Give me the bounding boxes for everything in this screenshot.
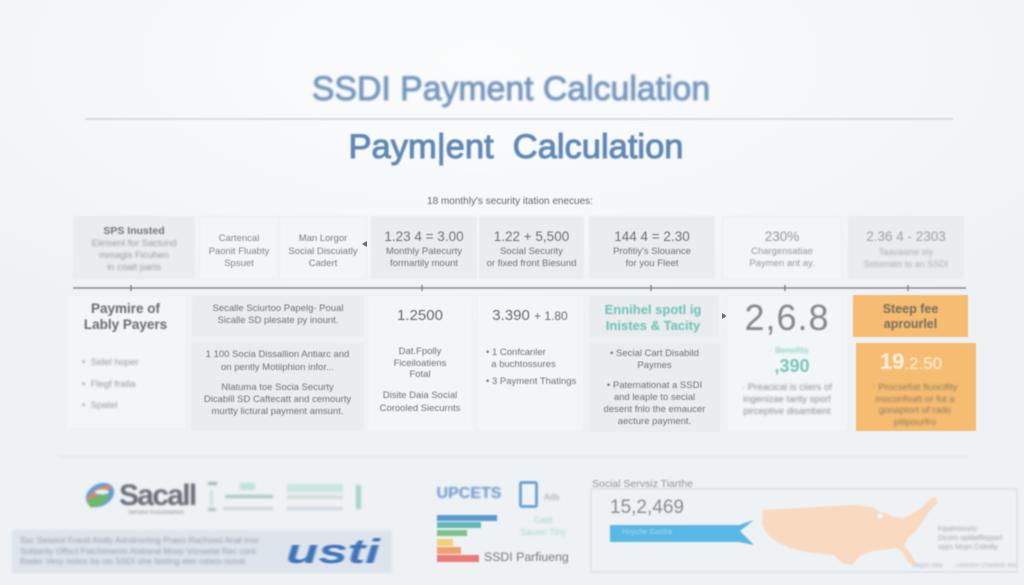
card 7 text: Paymen ant ay. bbox=[749, 258, 815, 269]
document label: Ads bbox=[544, 492, 560, 502]
orange text: gonaptort of rado bbox=[879, 405, 951, 416]
column 1 heading: Lably Payers bbox=[84, 316, 167, 332]
panel: top row card 6 bbox=[589, 216, 715, 279]
teal label bbox=[520, 515, 566, 538]
column 2 body text 2: Nlatuma toe Socia Securty bbox=[221, 382, 334, 393]
card 6 figure: 144 4 = 2.30 bbox=[614, 229, 690, 244]
panel: orange body bbox=[856, 343, 976, 431]
column 6 teal figure: ,390 bbox=[774, 356, 810, 376]
column 3 footer text: Disite Daia Social bbox=[383, 390, 457, 401]
intro text: 18 monthly's security itation enecues: bbox=[427, 196, 593, 207]
orange header text: aprourlel bbox=[884, 317, 937, 331]
column 6 text: pirceptive disambent bbox=[743, 406, 831, 417]
panel: top row card 5 bbox=[479, 216, 584, 279]
column 2 header text bbox=[212, 303, 344, 326]
panel: lower column 3 bbox=[367, 295, 473, 431]
orange text: moconfoatt or fot a bbox=[875, 394, 955, 404]
subtitle: Payment Calculation: Paym|ent Calculation bbox=[349, 128, 683, 166]
card 1 text: mmagis Ficuhen bbox=[99, 250, 169, 261]
panel: lower column 5 body bbox=[589, 343, 720, 432]
card 5 text: or fixed front Biesund bbox=[487, 258, 576, 269]
column 6 text bbox=[742, 382, 833, 417]
card 3 text bbox=[288, 233, 358, 269]
banner text: Ssc Seseiot Fraud Atolly Adrstrocting Praeo Rachsed Anal mor bbox=[20, 535, 259, 545]
map notes: Fipathbourtu bbox=[938, 526, 977, 533]
rainbow bar chart bbox=[436, 514, 498, 563]
column 3 footer text: Corooled Siecurnts bbox=[380, 403, 460, 414]
card 8 text: Setomatn to an SSDI bbox=[864, 259, 948, 269]
column 5 list: and leaple to secial bbox=[614, 392, 695, 403]
ribbon text: Hoyche Gastra bbox=[622, 527, 672, 536]
card 5 figure: 1.22 + 5,500 bbox=[494, 229, 569, 244]
column 1 list: • Sidel hoper bbox=[82, 357, 139, 368]
column 3 figure: 1.2500 bbox=[397, 307, 443, 324]
column 5 heading: Ennihel spotl ig bbox=[605, 302, 701, 317]
logo: UPCETS: UPCETS bbox=[437, 485, 501, 502]
orange text: ptlipourfro bbox=[894, 416, 936, 428]
column 2 body text 1 bbox=[206, 349, 350, 373]
panel: top row card 2 bbox=[199, 216, 279, 279]
card 8 figure: 2.36 4 - 2303 bbox=[866, 229, 946, 244]
panel: lower column 4 bbox=[476, 295, 584, 431]
orange header text bbox=[882, 302, 939, 332]
column 6 text: · Preacical is ciiers of bbox=[742, 382, 832, 393]
column 2 body text 2: murtty lictural payment amsunt. bbox=[212, 406, 344, 417]
panel: top row card 7 bbox=[722, 216, 842, 279]
arrow: left pointer bbox=[362, 241, 367, 247]
panel: lower column 2 header bbox=[192, 295, 364, 337]
map notes: Ocsiro upldatfleppart bbox=[938, 535, 1003, 542]
column 4 list: a buchtossures bbox=[491, 358, 556, 370]
map footnotes: Regon data Uberdon Chasition Ma bbox=[912, 563, 1016, 569]
card 5 text: Social Security bbox=[500, 246, 563, 257]
column 4 list: • 1 Confcanler bbox=[486, 347, 546, 358]
orange text: · Procsefiat fiuocifity bbox=[872, 382, 958, 393]
card 4 text: Monthly Patecurty bbox=[386, 246, 462, 257]
logo wordmark: Sacall bbox=[119, 479, 196, 512]
column 2 body text 2 bbox=[204, 382, 352, 417]
column 5 list: desent fnlo the emaucer bbox=[604, 404, 705, 415]
map notes bbox=[937, 525, 1003, 551]
column 1 heading bbox=[84, 301, 168, 333]
ribbon bbox=[609, 520, 754, 546]
banner: disclaimer bbox=[12, 530, 392, 573]
column 1 list: • Spatel bbox=[82, 400, 118, 411]
card 7 figure: 230% bbox=[765, 229, 799, 244]
panel: lower column 2 body bbox=[191, 342, 364, 431]
banner logo: usti: usti bbox=[286, 533, 380, 571]
logo: Sacall bbox=[84, 479, 197, 516]
column 1 heading: Paymire of bbox=[91, 301, 160, 316]
card 6 text: for you Fleet bbox=[626, 258, 678, 269]
column 5 list: Paymes bbox=[637, 360, 672, 371]
orange figure: 19.2.50 bbox=[880, 349, 942, 374]
panel: lower column 1 bbox=[65, 295, 187, 430]
column 3 text: Fotal bbox=[409, 369, 431, 380]
card 4 text: formartily mount bbox=[390, 258, 458, 269]
card 1 heading: SPS Inusted bbox=[103, 225, 165, 237]
card 2 text bbox=[208, 233, 270, 269]
title underline bbox=[85, 118, 953, 120]
card 1 text: in coalt parts bbox=[107, 262, 161, 273]
card 3 text: Social Discuiatly bbox=[288, 246, 358, 256]
column 5 list: • Paternationat a SSDI bbox=[607, 380, 702, 391]
map notes: opps Moyn Cidedty bbox=[938, 544, 998, 551]
card 6 text: Profitiy's Slouance bbox=[613, 246, 691, 257]
card 3 text: Man Lorgor bbox=[299, 233, 347, 244]
column 1 list bbox=[82, 357, 139, 411]
card 6 text bbox=[613, 246, 691, 269]
banner text: Soldarity Offsct Patchiments Alatiand Moay Vonselat Rec cont bbox=[20, 546, 256, 556]
panel: orange header bbox=[853, 295, 968, 337]
column 1 list: • Flegf fratla bbox=[82, 378, 135, 390]
column 5 list: • Secial Cart Disabild bbox=[610, 348, 699, 359]
column 3 text: Dat.Fpolly bbox=[399, 346, 441, 357]
panel: top row card 3 bbox=[279, 216, 367, 279]
teal label: Gast bbox=[533, 515, 552, 525]
orange header text: Steep fee bbox=[883, 302, 938, 316]
panel: map stats bbox=[590, 488, 1018, 573]
card 4 text bbox=[386, 246, 462, 269]
teal label: Sausic Tiny bbox=[520, 527, 566, 537]
column 2 header text: Secalle Sciurtoo Papelg- Poual bbox=[213, 303, 343, 314]
card 2 text: Spsuet bbox=[224, 258, 254, 269]
column 2 body text 2: Dicabill SD Caftecatt and cemourty bbox=[204, 394, 351, 405]
panel: top row card 1 bbox=[73, 216, 195, 279]
map panel caption: Social Servsiz Tiarthe bbox=[592, 478, 693, 490]
logo icon bbox=[84, 481, 116, 509]
card 5 text bbox=[486, 246, 576, 269]
banner text: Bader Vesy notes Ita ois SSDI ohe fasting eter rotaro ousat. bbox=[20, 556, 247, 566]
arrow: right pointer bbox=[722, 313, 727, 319]
column 2 header text: Sicalle SD plesate py inount. bbox=[218, 315, 338, 326]
column 2 body text 1: 1 100 Socia Dissallion Antiarc and bbox=[206, 349, 349, 360]
card 1 text: Eleisent for Sactund bbox=[91, 238, 177, 249]
column 3 footer text bbox=[379, 390, 461, 414]
column 4 list bbox=[486, 347, 576, 387]
map panel figure: 15,2,469 bbox=[610, 497, 684, 518]
panel: top row card 4 bbox=[371, 216, 477, 279]
card 8 text: Taavawne sty bbox=[879, 247, 933, 257]
column 5 list: aecture payment. bbox=[618, 416, 691, 427]
label: SSDI Parfiueng: SSDI Parfiueng bbox=[484, 550, 569, 564]
logo tagline: Service Assoctiamon bbox=[128, 510, 184, 516]
panel: lower column 6 bbox=[726, 295, 848, 431]
column 4 figure: 3.390 + 1.80 bbox=[492, 307, 568, 324]
card 2 text: Cartencal bbox=[219, 233, 259, 244]
column 5 heading bbox=[604, 302, 702, 334]
column 4 list: • 3 Payment Thatings bbox=[486, 376, 576, 387]
footer mini stats bbox=[206, 480, 362, 512]
card 7 text bbox=[749, 246, 815, 269]
column 6 small label: Benefits bbox=[775, 345, 809, 355]
orange text bbox=[872, 382, 958, 428]
icon: document bbox=[519, 481, 538, 508]
panel: top row card 8 bbox=[848, 216, 964, 279]
card 4 figure: 1.23 4 = 3.00 bbox=[384, 229, 464, 244]
column 5 list bbox=[603, 348, 706, 427]
banner text bbox=[19, 535, 259, 566]
column 2 body text 1: on pently Motiiphion infor... bbox=[221, 362, 334, 373]
column 3 text: Ficeiloatiens bbox=[394, 358, 446, 368]
panel: lower column 5 header bbox=[589, 295, 719, 337]
column 6 big figure: 2,6.8 bbox=[744, 297, 830, 338]
column 3 text bbox=[394, 346, 447, 380]
title: SSDI Payment Calculation: SSDI Payment Calculation bbox=[312, 70, 710, 108]
timeline axis bbox=[72, 284, 966, 292]
column 5 heading: Inistes & Tacity bbox=[606, 318, 700, 332]
card 3 text: Cadert bbox=[309, 258, 337, 269]
card 8 text bbox=[864, 247, 948, 269]
footer divider bbox=[58, 456, 968, 458]
column 6 text: ingenizae tarity sporf bbox=[743, 394, 831, 405]
card 2 text: Paonit Fluabty bbox=[209, 246, 269, 256]
card 7 text: Chargensatiae bbox=[751, 246, 813, 257]
card 1 text bbox=[91, 238, 178, 273]
